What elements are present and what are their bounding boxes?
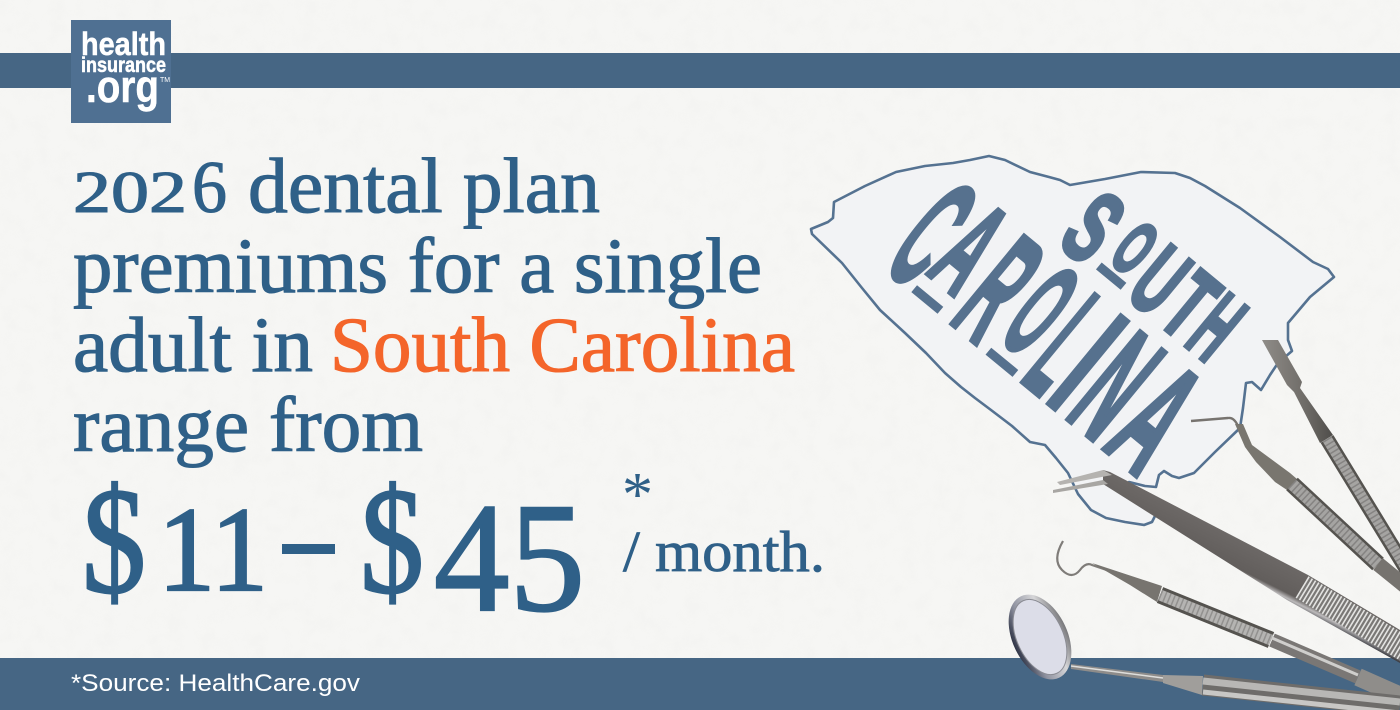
logo: healthinsurance.org: health: [81, 26, 166, 62]
headline: South Carolina: [330, 301, 795, 388]
serrated grip: [1302, 587, 1400, 652]
word: South: T: [1142, 252, 1238, 359]
headline: premiums for a single: [73, 222, 762, 309]
price range: $: [360, 457, 424, 625]
source note: *Source: HealthCare.gov: [71, 670, 360, 697]
South Carolina state map: [811, 95, 1334, 525]
headline: [73, 142, 795, 468]
word: Carolina: A: [906, 177, 1035, 321]
logo: healthinsurance.org: TM: [160, 77, 170, 84]
dental tool: mouth mirror: [996, 585, 1400, 710]
dental tool: spatula: [1262, 340, 1400, 575]
word: Carolina: [858, 151, 1234, 506]
headline: adult in: [73, 301, 313, 388]
dental tool: hook explorer: [1057, 541, 1400, 700]
price range: 11: [158, 483, 268, 617]
dental tool: tweezers: [1053, 470, 1400, 663]
word: Carolina: I: [1020, 285, 1155, 441]
bottom band: [0, 658, 1400, 710]
word: Carolina: C: [858, 151, 1005, 318]
logo: healthinsurance.org: .org: [86, 61, 159, 112]
headline: dental plan: [248, 142, 600, 229]
dental tool: angled scaler: [1191, 418, 1400, 590]
word: South: [1041, 171, 1265, 384]
logo: healthinsurance.org: [71, 20, 171, 123]
word: Carolina: L: [996, 264, 1136, 426]
top band: [0, 53, 1400, 88]
state name lettering: [858, 95, 1280, 506]
word: Carolina: O: [977, 239, 1105, 383]
word: Carolina: R: [925, 206, 1073, 374]
headline: range from: [73, 381, 423, 468]
word: South: H: [1169, 274, 1265, 381]
word: Carolina: N: [1040, 301, 1192, 472]
headline: 6: [192, 147, 227, 229]
price range: [82, 457, 585, 644]
logo: healthinsurance.org: insurance: [81, 54, 166, 77]
word: South: U: [1110, 226, 1210, 336]
per month label: / month.: [623, 519, 825, 584]
word: Carolina: A: [1078, 332, 1234, 506]
word: South: O: [1096, 207, 1173, 291]
headline: 202: [73, 159, 187, 225]
price range: 45: [434, 471, 585, 644]
price range: $: [82, 457, 146, 625]
asterisk: *: [622, 461, 653, 529]
word: South: S: [1041, 171, 1144, 285]
